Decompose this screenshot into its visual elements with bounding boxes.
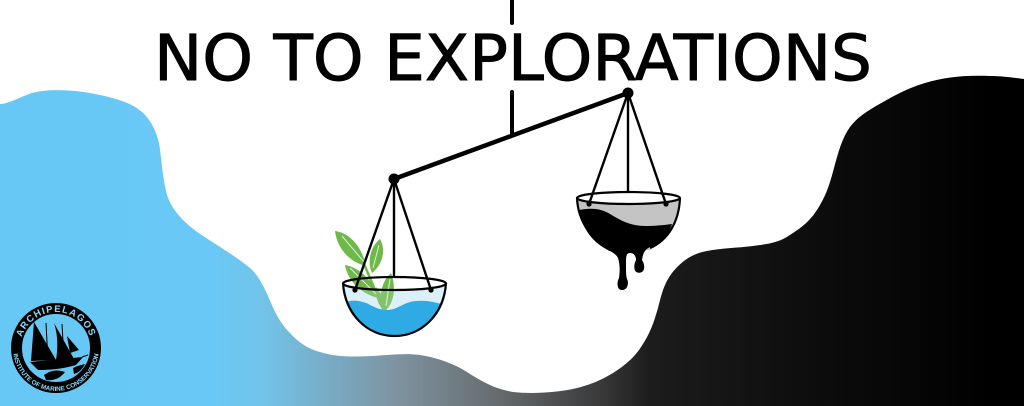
- logo ring: [16, 308, 96, 388]
- logo ring text: ARCHIPELAGOS: [16, 305, 96, 337]
- left pan: plants and water: [335, 179, 450, 340]
- glass overlay: [358, 286, 394, 310]
- title: NO TO EXPLORATIONS: [154, 22, 872, 95]
- icon: green leaves: [335, 231, 394, 311]
- bowl interior light water: [344, 284, 444, 310]
- logo: Archipelagos: INSTITUTE OF MARINE CONSERVATION: [13, 354, 98, 391]
- water: [348, 300, 440, 335]
- scale: centre pole: [510, 0, 514, 134]
- grey bowl interior: [577, 198, 680, 250]
- icon: sailing boat: [30, 322, 85, 380]
- right pan: oil: [577, 93, 680, 290]
- logo: Archipelagos: [11, 303, 101, 393]
- ropes: [589, 93, 666, 204]
- scale: beam: [388, 88, 634, 184]
- black oil with drips: [579, 209, 672, 290]
- bowl outline: [343, 283, 446, 336]
- ropes: [355, 179, 431, 290]
- bowl outline: [577, 198, 680, 250]
